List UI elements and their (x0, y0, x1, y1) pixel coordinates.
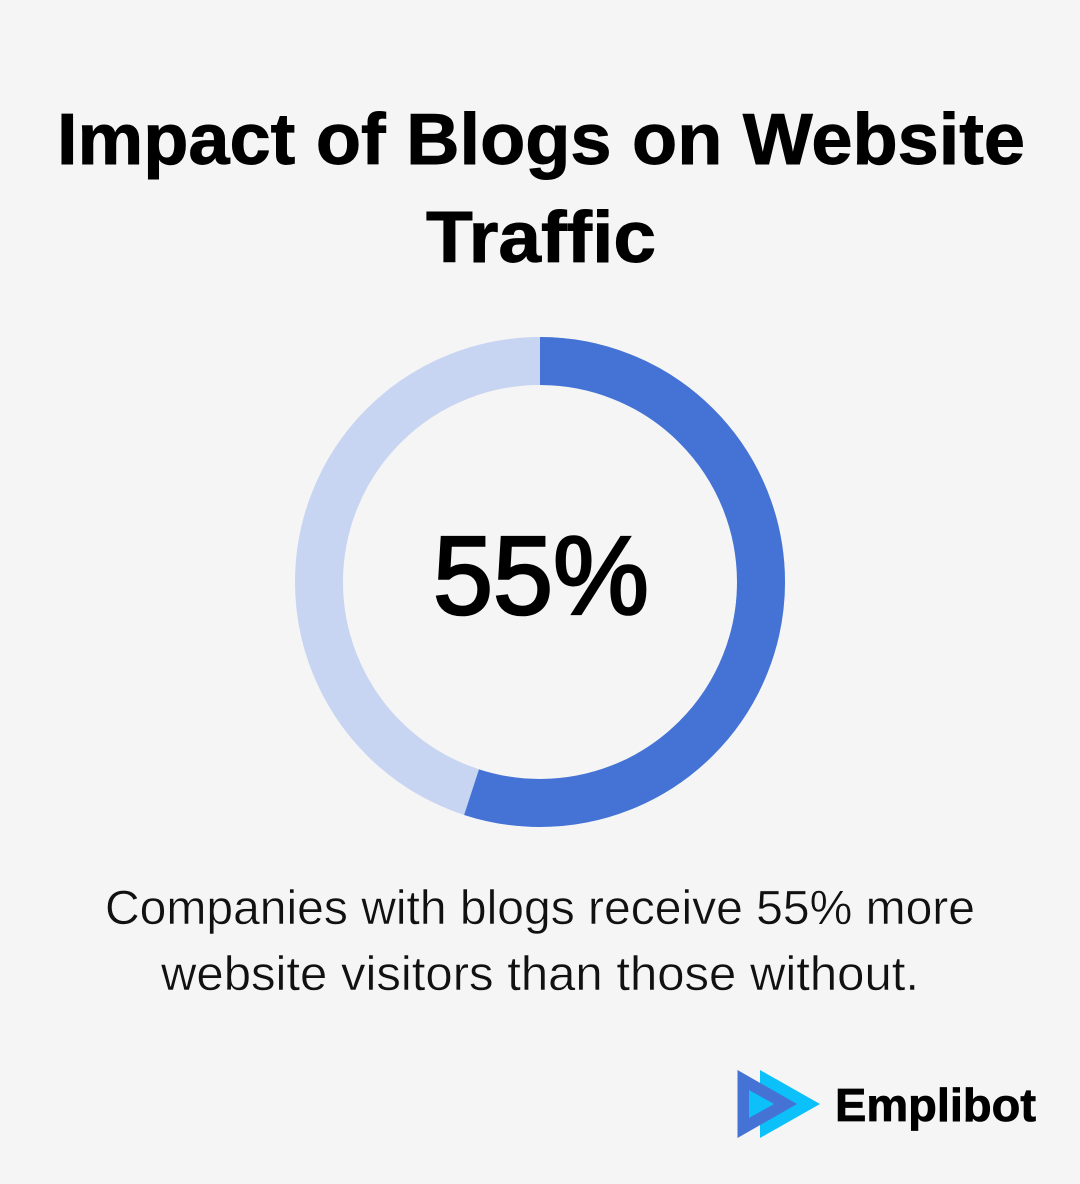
description text (105, 882, 975, 1001)
donut center value: 55% (433, 514, 649, 638)
donut value arc (319, 361, 761, 803)
title: Traffic (426, 198, 656, 278)
description text: website visitors than those without. (160, 948, 919, 1001)
description text: Companies with blogs receive 55% more (105, 882, 975, 935)
title (57, 100, 1025, 278)
logo wordmark: Emplibot (835, 1079, 1036, 1131)
title: Impact of Blogs on Website (57, 100, 1025, 180)
logo: Emplibot (738, 1070, 1036, 1138)
donut remainder track (319, 361, 761, 803)
icon: play triangles (738, 1070, 820, 1138)
donut chart: 55% (319, 361, 761, 803)
